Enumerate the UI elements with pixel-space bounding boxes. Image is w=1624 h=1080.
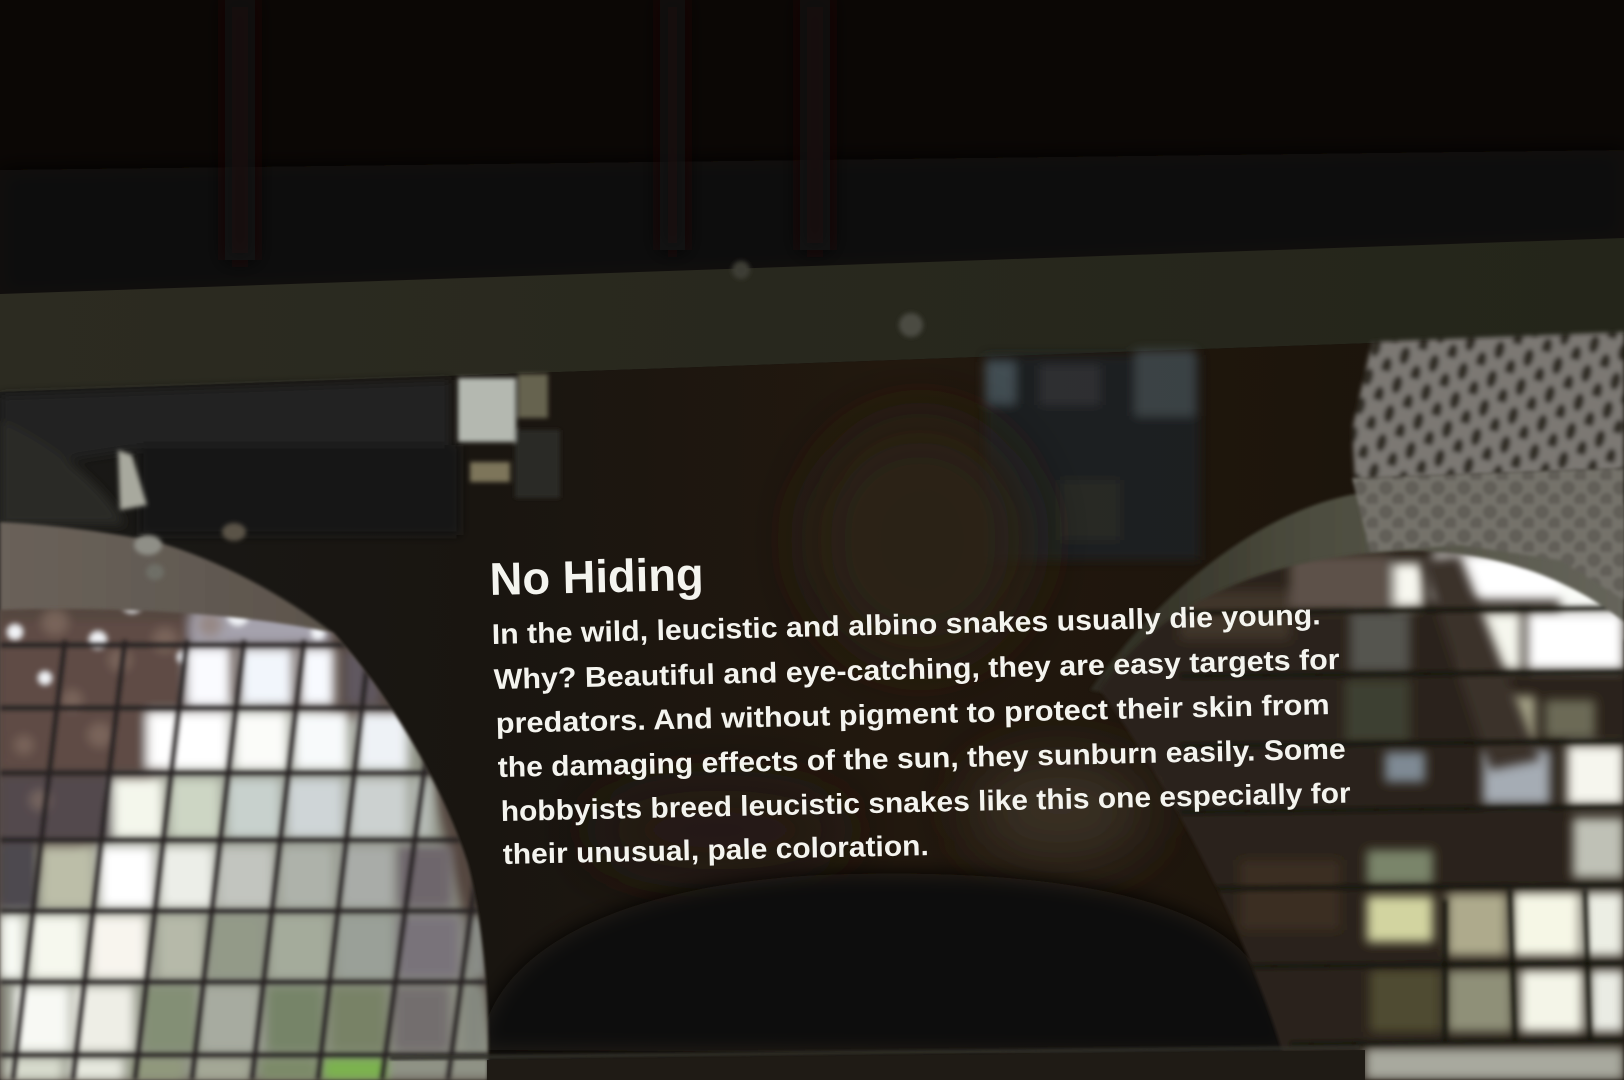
right window cells [1177, 550, 1624, 1080]
upper left reflection [0, 380, 460, 535]
left reflected highlights [118, 450, 246, 580]
sign frame bar [0, 238, 1624, 392]
dark trunk in the right window [1420, 555, 1540, 770]
left arch rim [0, 522, 488, 1080]
body line 6: their unusual, pale coloration. [502, 830, 929, 871]
heading: No Hiding [489, 548, 704, 605]
upper left window reflection [458, 374, 560, 498]
body line 5: hobbyists breed leucistic snakes like this one especially for [500, 777, 1351, 828]
left window base [0, 600, 500, 1080]
left window light specks [2, 608, 328, 689]
ceiling streaks [225, 0, 830, 260]
lower panel edge [390, 1046, 1360, 1060]
left window brown mottling [14, 608, 222, 811]
left arched window [0, 591, 500, 1080]
body line 4: the damaging effects of the sun, they sunburn easily. Some [497, 734, 1346, 784]
left window lower base [0, 700, 500, 1080]
right window grid [1180, 608, 1624, 1044]
sign panel [0, 334, 1624, 1080]
central warm reflection [590, 420, 1150, 870]
upper dark band [0, 150, 1624, 296]
right arched window [1090, 540, 1624, 1080]
right window base [1090, 540, 1624, 1080]
sign text block [489, 548, 1351, 871]
snake skin pattern, lower part [1352, 468, 1624, 600]
bottom strip below panel [487, 1050, 1365, 1080]
snake skin pattern, upper part [1352, 332, 1624, 480]
left window cells [0, 610, 487, 1080]
frame glints [732, 261, 923, 337]
left window grid [0, 640, 500, 1080]
body line 2: Why? Beautiful and eye-catching, they are easy targets for [493, 644, 1340, 696]
body line 1: In the wild, leucistic and albino snakes usually die young. [491, 599, 1321, 651]
body line 3: predators. And without pigment to protect their skin from [495, 689, 1330, 740]
upper right window reflection [985, 350, 1200, 560]
right arch rim [1090, 485, 1624, 700]
silhouette of the photographer's head [480, 874, 1295, 1055]
